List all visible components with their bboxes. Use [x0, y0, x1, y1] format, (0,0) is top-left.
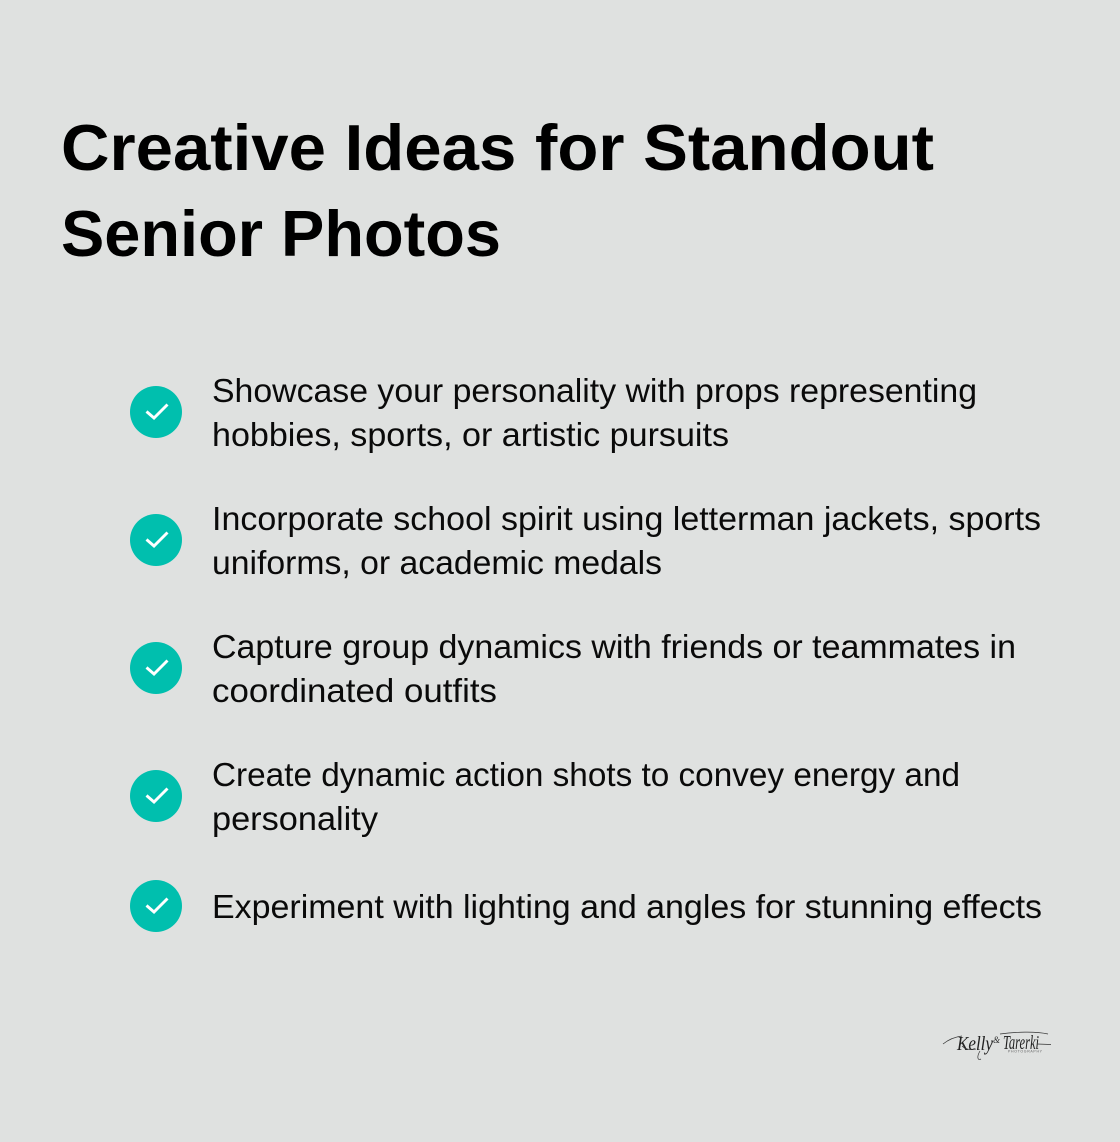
item 2: school spirit — [130, 500, 1041, 581]
item 3: group dynamics: coordinated outfits — [212, 672, 497, 709]
item 1: personality props: Showcase your personality with props representing — [212, 372, 977, 409]
item 1: personality props — [130, 372, 977, 453]
item 5: lighting and angles — [130, 880, 1042, 932]
item 4: action shots — [130, 756, 960, 837]
title: Creative Ideas for Standout — [61, 111, 934, 184]
item 2: school spirit: Incorporate school spirit using letterman jackets, sports — [212, 500, 1041, 537]
signature logo: & — [993, 1035, 1000, 1045]
item 2: school spirit: uniforms, or academic medals — [212, 544, 662, 581]
title — [61, 111, 934, 270]
checklist — [130, 372, 1042, 932]
item 4: action shots: personality — [212, 800, 379, 837]
signature logo: PHOTOGRAPHY — [1008, 1050, 1043, 1054]
item 1: personality props: hobbies, sports, or artistic pursuits — [212, 416, 729, 453]
signature logo: Kelly — [956, 1033, 993, 1055]
signature logo: Tarerki — [1003, 1032, 1039, 1054]
signature logo — [943, 1032, 1051, 1059]
title: Senior Photos — [61, 197, 501, 270]
item 3: group dynamics — [130, 628, 1016, 709]
item 3: group dynamics: Capture group dynamics with friends or teammates in — [212, 628, 1016, 665]
item 5: lighting and angles: Experiment with lighting and angles for stunning effects — [212, 888, 1042, 925]
item 4: action shots: Create dynamic action shots to convey energy and — [212, 756, 960, 793]
